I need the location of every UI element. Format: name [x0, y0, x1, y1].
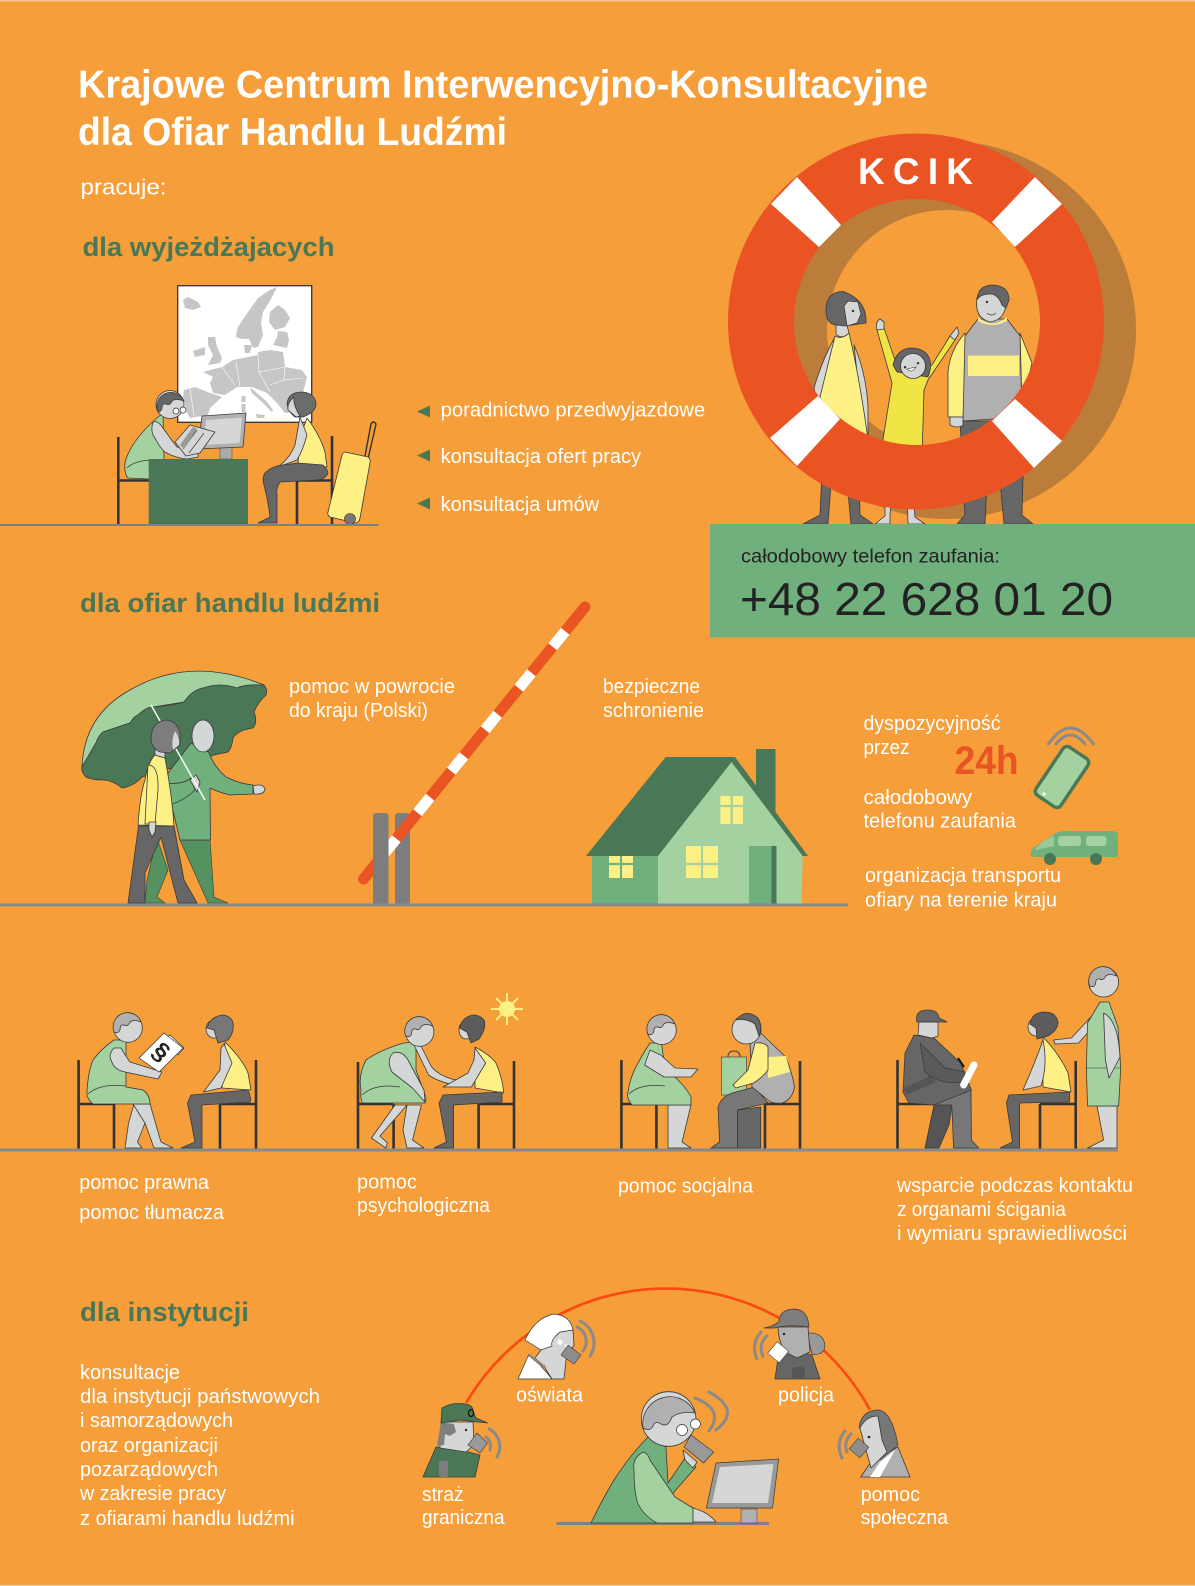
- law book: §: [147, 1037, 175, 1067]
- lifebuoy shadow: [758, 141, 1136, 519]
- icon: sun: [491, 993, 523, 1025]
- list: services for departing: poradnictwo przedwyjazdowe: [441, 400, 705, 422]
- text: institutions consultation: konsultacje: [80, 1362, 180, 1384]
- label: straż graniczna: [422, 1484, 505, 1529]
- hand holding phone: [683, 1450, 697, 1468]
- text: shelter: [603, 676, 704, 722]
- illustration: border barrier: [364, 607, 585, 905]
- scene: psychological aid: [358, 993, 523, 1150]
- bust: border guard: [423, 1404, 500, 1477]
- icon: van: [1031, 831, 1118, 865]
- lifebuoy ring: [728, 134, 1104, 510]
- panel: helpline: +48 22 628 01 20: [740, 573, 1113, 625]
- chairs: [621, 1060, 800, 1150]
- title: Krajowe Centrum Interwencyjno-Konsultacyjne: [78, 64, 928, 106]
- text: return assistance: [289, 676, 455, 722]
- arm: [634, 1452, 693, 1523]
- bullet: [417, 498, 430, 510]
- man in green: [145, 720, 265, 903]
- monitor: [175, 413, 246, 459]
- text: psychological aid: [357, 1172, 491, 1217]
- client with luggage: [258, 392, 376, 524]
- law book: [139, 1033, 184, 1072]
- text: shelter: bezpieczne: [603, 676, 700, 698]
- illustration: couple under umbrella: [82, 671, 267, 903]
- notepad: [958, 1058, 974, 1085]
- text: transport: organizacja transportu: [865, 865, 1061, 887]
- central consultant on the phone: [556, 1392, 779, 1525]
- text: institutions consultation: pozarządowych: [80, 1459, 218, 1481]
- standing supporter: [1054, 967, 1121, 1148]
- text: return assistance: pomoc w powrocie: [289, 676, 455, 698]
- desk: [149, 459, 248, 525]
- list: services for departing: konsultacja umów: [441, 494, 600, 516]
- head: [641, 1392, 696, 1446]
- illustration: house: [586, 749, 808, 904]
- text: law enforcement support: z organami ścigania: [897, 1199, 1067, 1221]
- text: shelter: schronienie: [603, 700, 704, 722]
- psychologist: [360, 1017, 462, 1148]
- connection arc: [466, 1289, 870, 1410]
- text: 24h availability: przez: [864, 737, 910, 759]
- woman: [803, 292, 873, 524]
- patient: [434, 1015, 504, 1148]
- phone: [684, 1435, 714, 1463]
- text: law enforcement support: wsparcie podczas kontaktu: [896, 1175, 1133, 1197]
- text: 24h availability: [864, 713, 1019, 832]
- scene: legal aid: [79, 1013, 256, 1150]
- chairs: [118, 436, 332, 525]
- label: straż graniczna: straż: [422, 1484, 464, 1506]
- text: institutions consultation: dla instytucji państwowych: [80, 1386, 320, 1408]
- text: return assistance: do kraju (Polski): [289, 700, 428, 722]
- monitor: [706, 1459, 779, 1523]
- label: pomoc społeczna: pomoc: [861, 1484, 920, 1506]
- chairs: [79, 1060, 256, 1150]
- umbrella handle: [151, 705, 205, 800]
- heading: dla wyjeżdżających: dla wyjeżdżajacych: [82, 232, 334, 262]
- bust: education: [518, 1314, 594, 1379]
- heading: dla instytucji: dla instytucji: [80, 1297, 249, 1327]
- lifebuoy label: KCIK: [858, 151, 973, 192]
- list: services for departing: [417, 400, 705, 516]
- seated woman: [1000, 1012, 1071, 1148]
- woman in yellow: [128, 720, 197, 903]
- officer: [903, 1010, 979, 1148]
- label: oświata: oświata: [516, 1384, 584, 1406]
- text: 24h availability: 24h: [955, 739, 1019, 783]
- glasses: [676, 1424, 688, 1436]
- icon: mobile phone: [1033, 728, 1094, 809]
- lawyer: [87, 1013, 173, 1148]
- text: institutions consultation: i samorządowych: [80, 1410, 233, 1432]
- text: legal aid: pomoc prawna: [79, 1172, 210, 1194]
- ground line: [0, 1148, 1118, 1152]
- text: transport: [865, 865, 1061, 912]
- ground line: [0, 524, 379, 526]
- map of Europe: [178, 286, 312, 422]
- panel: helpline: całodobowy telefon zaufania:: [741, 546, 1000, 568]
- text: transport: ofiary na terenie kraju: [865, 890, 1057, 912]
- bullet: [417, 450, 430, 462]
- label: pomoc społeczna: [861, 1484, 949, 1529]
- title: [78, 64, 928, 154]
- label: policja: policja: [778, 1384, 835, 1406]
- bust: police: [755, 1309, 825, 1379]
- text: 24h availability: całodobowy: [864, 787, 972, 809]
- text: institutions consultation: [79, 1362, 320, 1530]
- text: legal aid: [79, 1172, 225, 1224]
- label: pomoc społeczna: społeczna: [861, 1507, 949, 1529]
- text: legal aid: pomoc tłumacza: [79, 1202, 225, 1224]
- ground line: [0, 904, 848, 906]
- social worker: [628, 1015, 698, 1148]
- client: [181, 1015, 251, 1148]
- scene: law enforcement contact: [898, 967, 1121, 1150]
- bust: social services: [839, 1410, 910, 1477]
- umbrella: [82, 671, 267, 788]
- text: law enforcement support: [896, 1175, 1133, 1245]
- text: psychological aid: psychologiczna: [357, 1195, 491, 1217]
- title: dla Ofiar Handlu Ludźmi: [78, 111, 507, 154]
- chairs: [358, 1061, 514, 1150]
- text: 24h availability: dyspozycyjność: [864, 713, 1000, 735]
- counsellor: [125, 390, 198, 479]
- man: [948, 285, 1033, 524]
- signal arcs: [695, 1398, 715, 1431]
- text: 24h availability: telefonu zaufania: [864, 810, 1017, 832]
- panel: helpline: [710, 524, 1195, 638]
- table: [556, 1522, 769, 1525]
- text: psychological aid: pomoc: [357, 1172, 417, 1194]
- text: law enforcement support: i wymiaru sprawiedliwości: [897, 1223, 1127, 1245]
- intro text: pracuje: pracuje:: [80, 174, 166, 200]
- list: services for departing: konsultacja ofert pracy: [441, 446, 641, 468]
- text: institutions consultation: z ofiarami handlu ludźmi: [80, 1508, 294, 1530]
- shopping bag: [721, 1051, 746, 1095]
- lifebuoy bands: [770, 177, 1062, 468]
- scene: social aid: [621, 1013, 800, 1150]
- client: [711, 1013, 795, 1148]
- heading: dla ofiar handlu ludźmi: dla ofiar handlu ludźmi: [80, 588, 380, 618]
- chairs: [898, 1060, 1076, 1150]
- label: straż graniczna: graniczna: [422, 1507, 505, 1529]
- hand: [693, 1508, 716, 1522]
- text: institutions consultation: oraz organizacji: [80, 1435, 218, 1457]
- body: [591, 1435, 696, 1523]
- illustration: consultation with map: [118, 286, 376, 525]
- bullet: [417, 406, 430, 418]
- text: institutions consultation: w zakresie pracy: [79, 1483, 226, 1505]
- lifebuoy with family: [728, 134, 1136, 524]
- text: social aid: pomoc socjalna: [618, 1176, 754, 1198]
- child: [875, 319, 959, 524]
